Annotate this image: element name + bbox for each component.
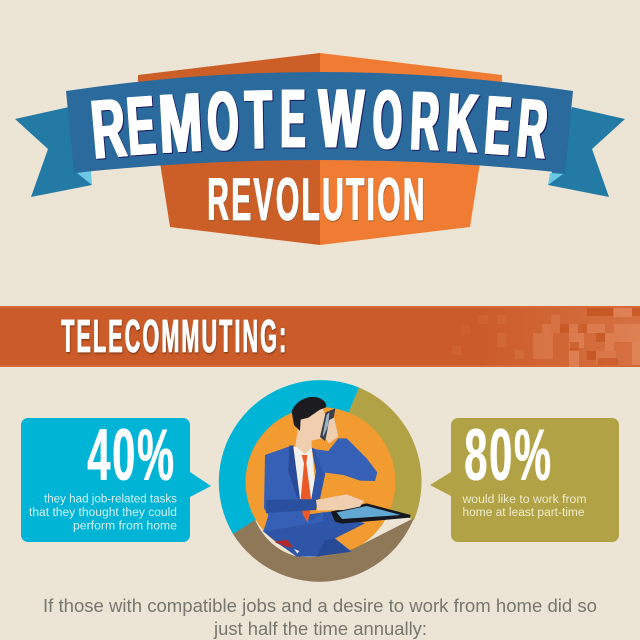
- pixel pattern, darker squares: [560, 308, 640, 365]
- title: REMOTE WORKER: W: [317, 73, 363, 166]
- segment: cyan: [219, 380, 359, 534]
- title: REMOTE WORKER: E: [123, 79, 157, 173]
- section band: telecommuting: [0, 306, 640, 367]
- jacket, left panel: [263, 445, 323, 532]
- ribbon left tail: [15, 107, 92, 197]
- jacket, right panel: [311, 448, 326, 499]
- title: REMOTE WORKER: R: [513, 81, 550, 176]
- closing text: [43, 595, 597, 639]
- closing text: If those with compatible jobs and a desire to work from home did so: [43, 595, 597, 616]
- section heading: TELECOMMUTING:: [61, 310, 288, 362]
- closing text: just half the time annually:: [213, 618, 427, 639]
- title: REMOTE WORKER: T: [243, 74, 272, 167]
- title: REMOTE WORKER: O: [205, 74, 239, 168]
- callout: 40%: [21, 414, 211, 542]
- ribbon right tail: [548, 107, 625, 197]
- donut chart with businessman: [219, 380, 422, 582]
- segment: olive: [320, 388, 422, 520]
- ribbon main band: [66, 72, 573, 173]
- description: perform from home: [73, 520, 177, 532]
- description: [29, 494, 177, 532]
- pixel pattern: [452, 308, 640, 367]
- title banner: [15, 53, 625, 245]
- tie: [301, 455, 311, 522]
- title: REMOTE WORKER: R: [408, 74, 440, 168]
- raised arm: [314, 438, 377, 481]
- hand: [316, 494, 364, 511]
- title: REMOTE WORKER: E: [481, 79, 513, 173]
- description: that they thought they could: [29, 507, 177, 519]
- stat number: 80%: [464, 414, 552, 496]
- tablet: [331, 503, 411, 524]
- chair: [275, 539, 298, 552]
- title: REMOTE WORKER: E: [280, 72, 304, 165]
- title: REMOTE WORKER: [87, 72, 550, 177]
- forearm: [266, 499, 318, 513]
- hair: [292, 397, 326, 431]
- phone: [320, 408, 335, 441]
- title: REMOTE WORKER: O: [371, 73, 402, 166]
- description: would like to work from: [461, 494, 586, 506]
- title: REMOTE WORKER: K: [443, 77, 480, 171]
- chair, front part: [276, 540, 293, 548]
- bubble: [21, 418, 211, 542]
- description: they had job-related tasks: [44, 494, 177, 506]
- legs: [263, 512, 365, 557]
- orange backing shape, top: [138, 53, 502, 100]
- segment: brown: [233, 518, 414, 582]
- description: [461, 494, 586, 519]
- shirt: [293, 447, 317, 499]
- title: REMOTE WORKER: M: [156, 75, 203, 171]
- orange centre: [246, 407, 396, 557]
- orange backing shape, bottom: [158, 150, 482, 245]
- bubble: [430, 418, 619, 542]
- neck and face: [295, 408, 329, 454]
- subtitle: REVOLUTION: REVOLUTION: [207, 167, 427, 234]
- callout: 80%: [430, 414, 619, 542]
- title: REMOTE WORKER: R: [87, 82, 128, 177]
- hand at ear: [326, 418, 338, 443]
- description: home at least part-time: [462, 507, 584, 519]
- stat number: 40%: [87, 414, 175, 496]
- businessman illustration: [263, 397, 411, 557]
